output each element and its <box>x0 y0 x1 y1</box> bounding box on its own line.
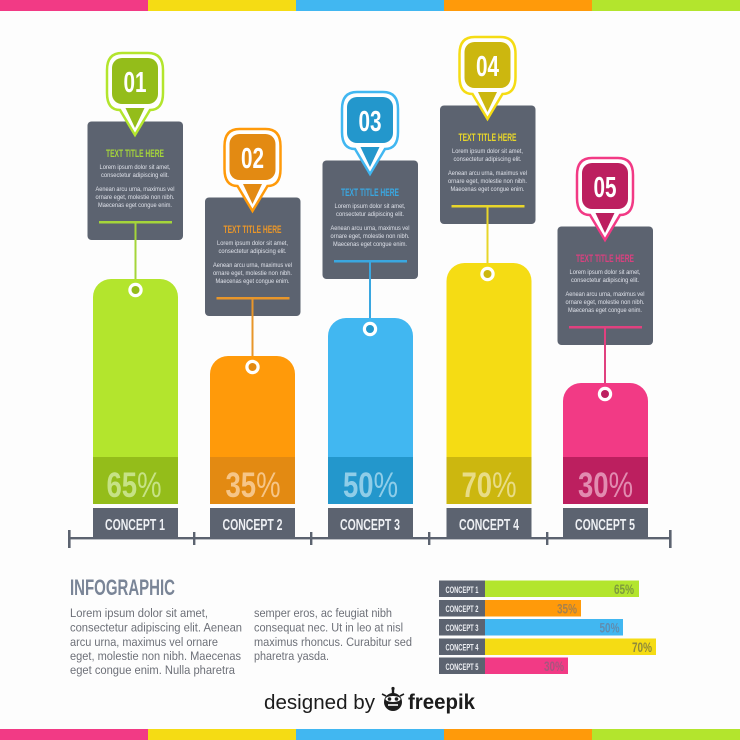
bar: concept 5 <box>439 658 568 674</box>
bar: concept 3 <box>439 619 623 636</box>
pin 03 <box>342 92 398 174</box>
tag bar 4 <box>446 263 532 504</box>
percentage 2: 35% <box>226 466 280 505</box>
tag bar 2 <box>210 356 295 504</box>
bar: concept 4 <box>439 638 656 655</box>
heading: infographic: INFOGRAPHIC <box>70 575 175 600</box>
bar: concept 2: CONCEPT 2 <box>446 604 478 615</box>
value band 4 <box>446 457 532 504</box>
concept tab 4 <box>446 508 532 539</box>
percentage 3: 50% <box>343 466 398 505</box>
pin 01 <box>107 53 163 135</box>
text card 3: ornare eget, molestie non nibh. <box>330 233 410 240</box>
concept tab 4: CONCEPT 4 <box>459 517 519 534</box>
pin 05: 05 <box>594 172 616 204</box>
text card 2: ornare eget, molestie non nibh. <box>213 270 292 277</box>
body text: consectetur adipiscing elit. Aenean <box>70 620 242 634</box>
percentage 1: 65% <box>106 466 162 505</box>
text card 5: Maecenas eget congue enim. <box>568 307 642 314</box>
text card 4: Maecenas eget congue enim. <box>450 186 525 193</box>
concept tab 2: CONCEPT 2 <box>222 517 283 534</box>
timeline axis <box>68 530 672 548</box>
concept tab 5 <box>563 508 648 539</box>
text card 5: consectetur adipiscing elit. <box>571 277 639 284</box>
connector 5 <box>604 326 606 383</box>
pin 05 <box>577 158 633 240</box>
bottom colour strip <box>0 729 740 740</box>
value band 1 <box>93 457 178 504</box>
body text: arcu urna, maximus vel ornare <box>70 635 218 649</box>
bar: concept 4: CONCEPT 4 <box>446 642 479 654</box>
pin 03: 03 <box>358 106 382 138</box>
tag bar 1 <box>93 279 178 504</box>
text card 4: Aenean arcu urna, maximus vel <box>448 170 527 177</box>
text card 5: Lorem ipsum dolor sit amet, <box>570 269 641 276</box>
percentage 5: 30% <box>578 466 633 505</box>
concept tab 1: CONCEPT 1 <box>105 517 165 534</box>
tag bar 3 <box>328 318 413 504</box>
body text: pharetra yasda. <box>254 649 329 663</box>
tag hole 5 <box>598 387 612 401</box>
concept tab 3 <box>328 508 413 539</box>
value band 5 <box>563 457 648 504</box>
text card 1 <box>88 122 183 240</box>
bar: concept 3: 50% <box>600 620 620 636</box>
bar: concept 5: CONCEPT 5 <box>446 662 479 673</box>
body text: semper eros, ac feugiat nibh <box>254 606 392 620</box>
text card 4 <box>440 106 536 224</box>
bar chart <box>439 580 656 674</box>
tag hole 1 <box>128 283 143 297</box>
text card 5: Aenean arcu urna, maximus vel <box>566 291 645 298</box>
text card 2: consectetur adipiscing elit. <box>218 248 287 255</box>
text card 1: ornare eget, molestie non nibh. <box>96 194 175 201</box>
connector 2 <box>252 298 254 356</box>
bar: concept 3: CONCEPT 3 <box>446 623 478 634</box>
text card 3: Lorem ipsum dolor sit amet, <box>334 203 406 210</box>
concept tab 3: CONCEPT 3 <box>340 517 400 534</box>
designed by freepik credit <box>264 687 475 714</box>
column: concept 1 <box>88 53 183 539</box>
connector 4 <box>486 206 488 263</box>
text card 4: consectetur adipiscing elit. <box>454 156 522 163</box>
text card 1: Lorem ipsum dolor sit amet, <box>100 164 171 171</box>
text card 2 <box>205 198 300 316</box>
text card 4: ornare eget, molestie non nibh. <box>448 178 527 185</box>
pin 02: 02 <box>241 143 264 175</box>
body text: eget, molestie non nibh. Maecenas <box>70 649 241 663</box>
text card 5: TEXT TITLE HERE <box>576 253 634 265</box>
text card 3: Maecenas eget congue enim. <box>333 241 407 248</box>
tag hole 2 <box>245 360 260 374</box>
text card 1: TEXT TITLE HERE <box>106 148 164 160</box>
connector 3 <box>369 261 371 318</box>
designed by freepik credit: freepik <box>408 691 475 714</box>
body text: maximus rhoncus. Curabitur sed <box>254 635 412 649</box>
column: concept 4 <box>440 37 536 539</box>
icon: freepik logo <box>382 687 404 711</box>
column: concept 5 <box>558 158 653 539</box>
bar: concept 1 <box>439 580 639 597</box>
text card 2: Maecenas eget congue enim. <box>216 278 290 285</box>
column: concept 3 <box>322 92 418 539</box>
bar: concept 5: 30% <box>544 659 564 674</box>
pin 01: 01 <box>124 67 146 99</box>
pin 04: 04 <box>476 51 499 83</box>
text card 2: Aenean arcu urna, maximus vel <box>213 262 292 269</box>
text card 2: Lorem ipsum dolor sit amet, <box>217 240 288 247</box>
bar: concept 4: 70% <box>632 640 652 655</box>
text card 1: Aenean arcu urna, maximus vel <box>96 186 175 193</box>
text card 4: Lorem ipsum dolor sit amet, <box>452 148 523 155</box>
text card 5: ornare eget, molestie non nibh. <box>566 299 645 306</box>
text card 2: TEXT TITLE HERE <box>224 224 282 236</box>
body text <box>70 606 412 677</box>
text card 5 <box>558 226 653 345</box>
concept tab 1 <box>93 508 178 539</box>
tag bar 5 <box>563 383 648 504</box>
bar: concept 1: 65% <box>614 582 634 597</box>
text card 3: Aenean arcu urna, maximus vel <box>330 225 410 232</box>
value band 2 <box>210 457 295 504</box>
text card 1: Maecenas eget congue enim. <box>98 202 172 209</box>
tag hole 4 <box>480 267 495 281</box>
tag hole 3 <box>363 322 377 336</box>
column: concept 2 <box>205 129 300 539</box>
body text: eget congue enim. Nulla pharetra <box>70 663 235 677</box>
connector 1 <box>134 222 136 279</box>
pin 04 <box>460 37 516 119</box>
text card 3: consectetur adipiscing elit. <box>336 211 404 218</box>
concept tab 5: CONCEPT 5 <box>575 517 635 534</box>
bar: concept 2: 35% <box>557 602 577 616</box>
percentage 4: 70% <box>462 466 516 505</box>
text card 3 <box>322 160 418 279</box>
body text: consequat nec. Ut in leo at nisl <box>254 620 403 634</box>
body text: Lorem ipsum dolor sit amet, <box>70 606 208 620</box>
text card 3: TEXT TITLE HERE <box>341 187 399 199</box>
bar: concept 2 <box>439 600 581 616</box>
top colour strip <box>0 0 740 11</box>
text card 1: consectetur adipiscing elit. <box>101 172 169 179</box>
bar: concept 1: CONCEPT 1 <box>446 585 479 596</box>
concept tab 2 <box>210 508 295 539</box>
text card 4: TEXT TITLE HERE <box>458 132 516 144</box>
designed by freepik credit: designed by <box>264 692 375 714</box>
value band 3 <box>328 457 413 504</box>
pin 02 <box>224 129 280 211</box>
